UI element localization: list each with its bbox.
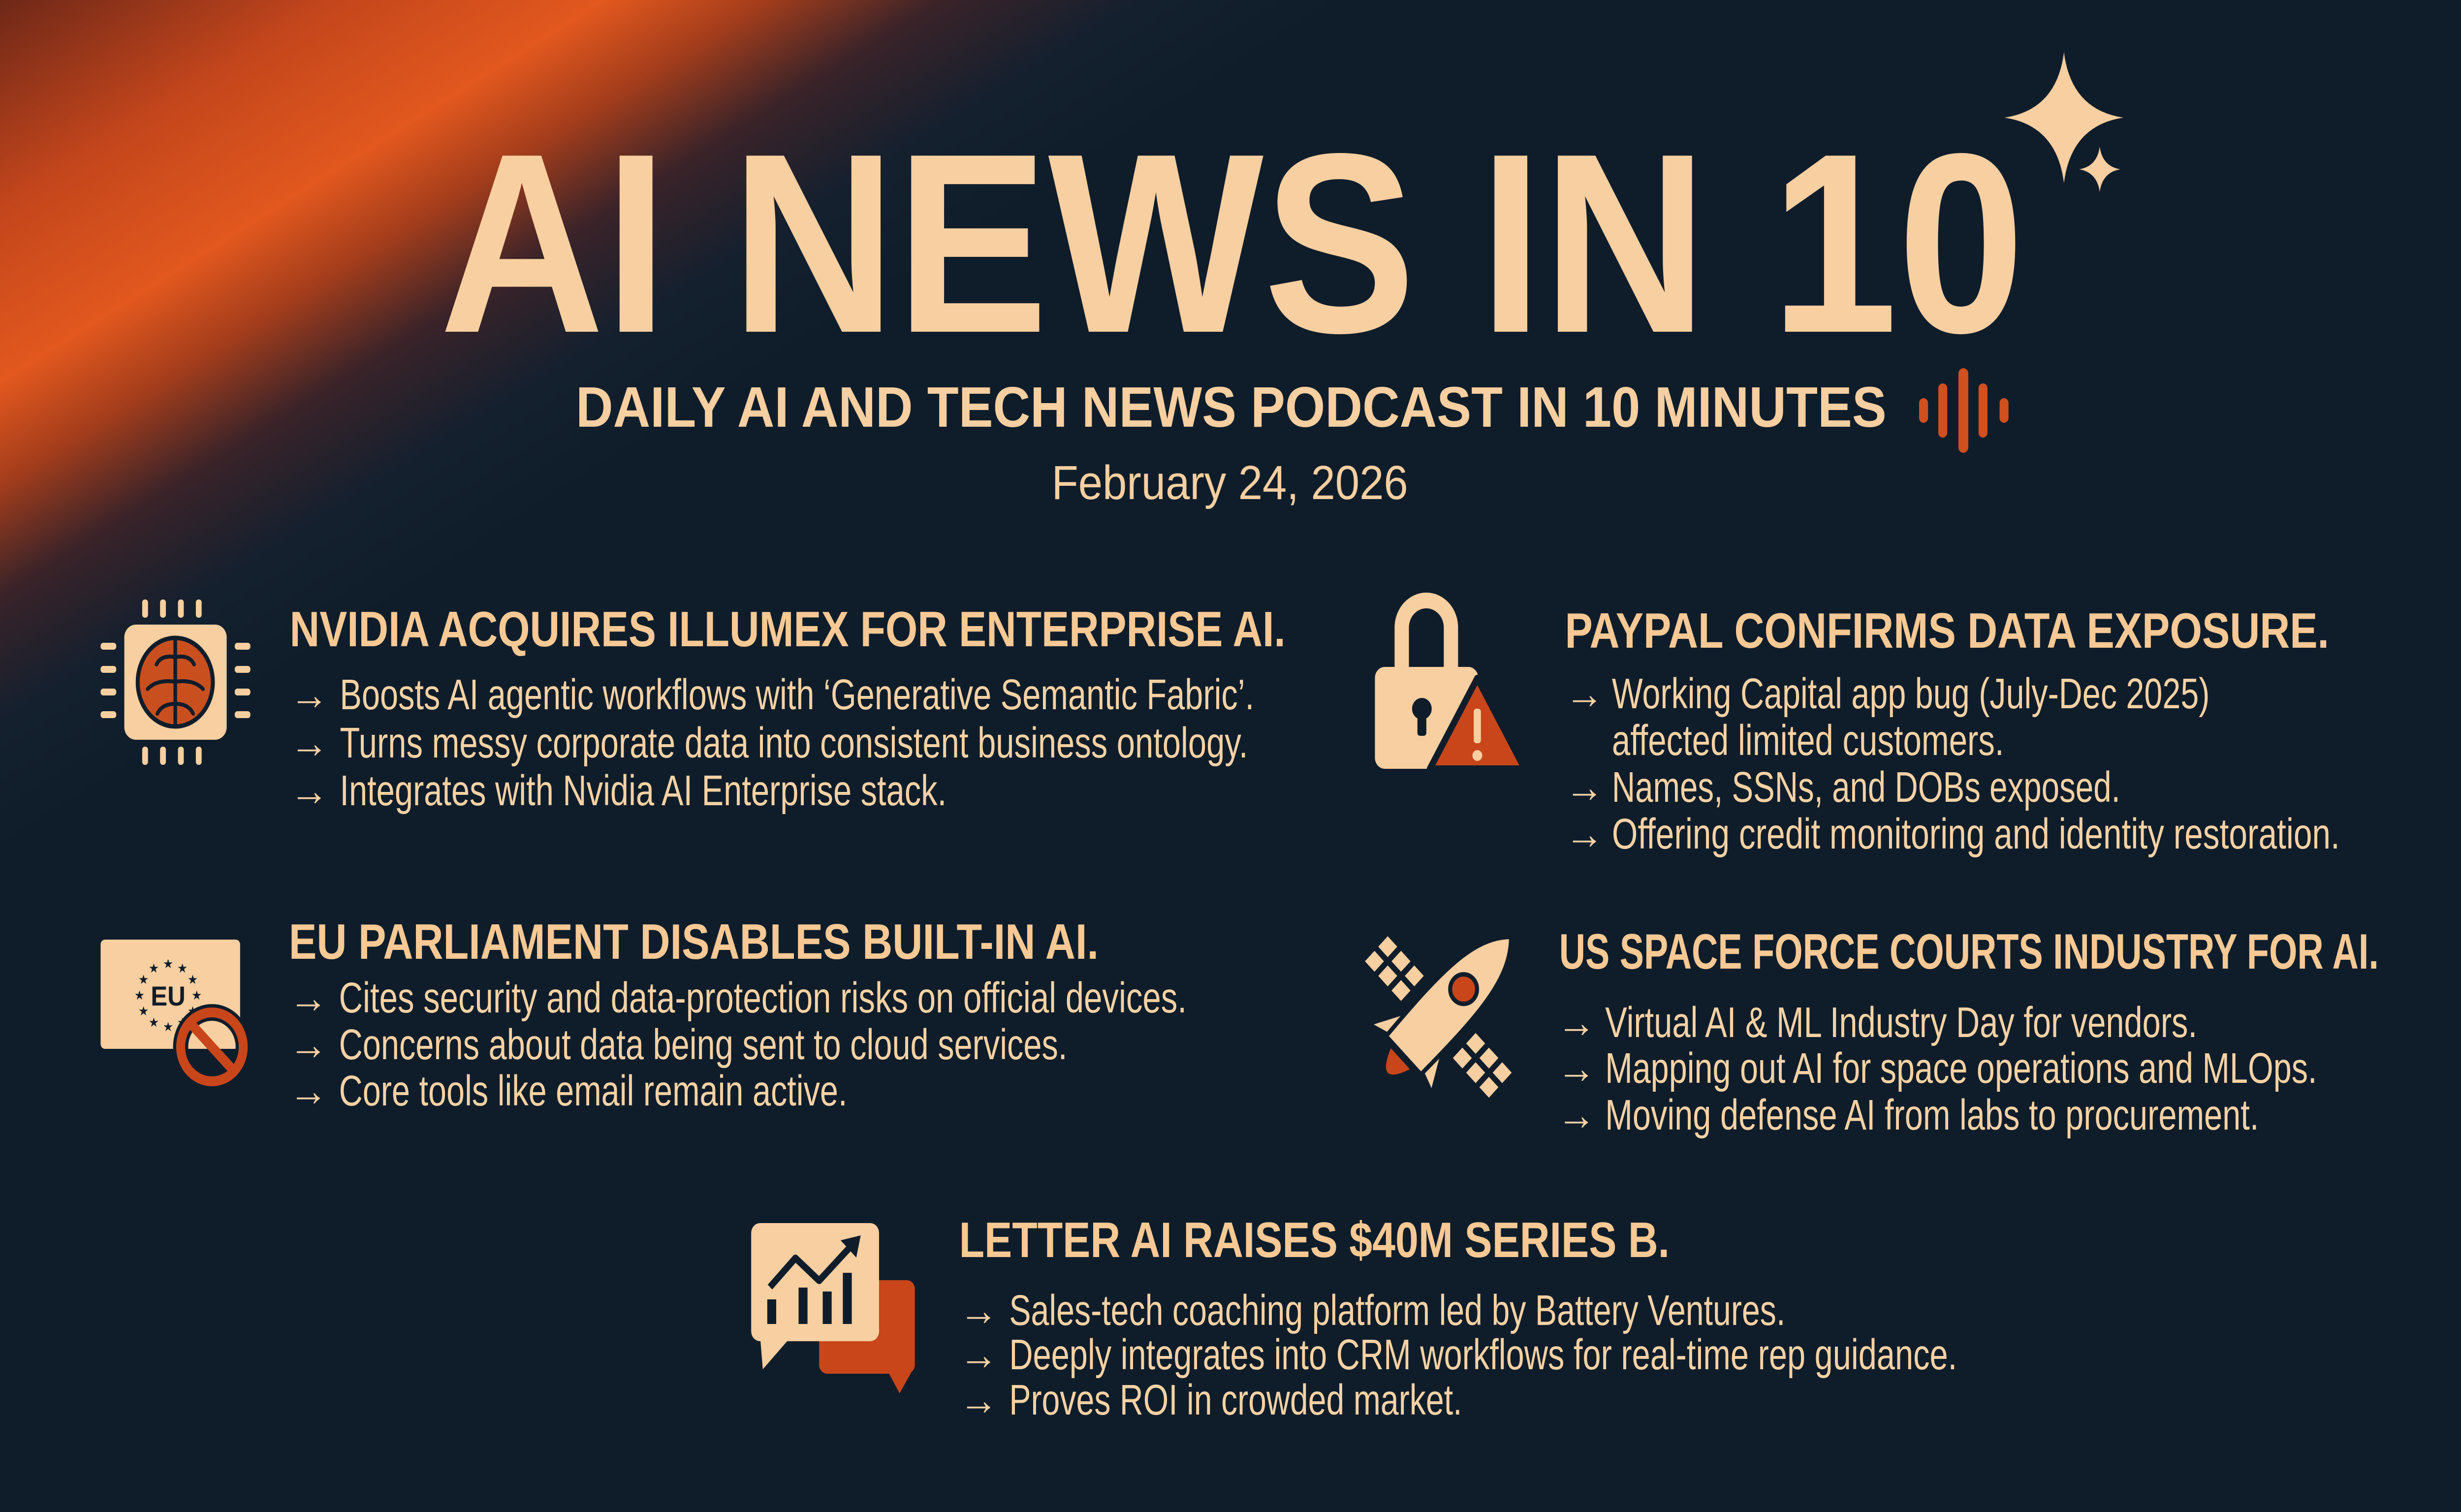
bullets: nvidia: → <box>290 670 329 719</box>
bullets: nvidia: Boosts AI agentic workflows with ‘Generative Semantic Fabric’. <box>340 670 1254 719</box>
icon: eu flag prohibited: ★ <box>149 1016 159 1030</box>
bullets: space force: → <box>1557 1044 1596 1092</box>
bullets: letter ai: → <box>959 1330 998 1379</box>
bullets: paypal: Names, SSNs, and DOBs exposed. <box>1612 763 2120 811</box>
heading: paypal: PAYPAL CONFIRMS DATA EXPOSURE. <box>1565 603 2329 659</box>
icon: eu flag prohibited: ★ <box>188 973 198 987</box>
bullets: space force: → <box>1557 998 1596 1046</box>
bullets: nvidia: Turns messy corporate data into consistent business ontology. <box>340 719 1248 767</box>
bullets: letter ai: → <box>959 1376 998 1424</box>
icon: chip with brain <box>100 599 251 765</box>
bullets: nvidia <box>290 670 1254 815</box>
bullets: eu: → <box>289 974 328 1022</box>
bullets: paypal: → <box>1565 763 1604 811</box>
bullets: paypal: affected limited customers. <box>1612 716 2004 764</box>
icon: sparkles <box>2004 52 2123 192</box>
icon: eu flag prohibited: ★ <box>177 1016 188 1030</box>
icon: rocket satellite <box>1325 867 1574 1142</box>
icon: eu flag prohibited: EU <box>151 981 186 1012</box>
icon: sound wave <box>1919 368 2009 453</box>
icon: eu flag prohibited: ★ <box>138 973 149 987</box>
icon: eu flag prohibited: ★ <box>177 962 188 976</box>
panel: space force <box>1325 867 2379 1142</box>
bullets: eu: Core tools like email remain active. <box>339 1067 847 1115</box>
bullets: eu: → <box>289 1067 328 1115</box>
bullets: paypal: Working Capital app bug (July-Dec 2025) <box>1612 669 2209 718</box>
panel: letter ai <box>751 1213 1957 1424</box>
bullets: paypal: Offering credit monitoring and identity restoration. <box>1612 810 2340 858</box>
icon: eu flag prohibited <box>100 940 243 1081</box>
bullets: space force <box>1557 998 2317 1139</box>
heading: nvidia: NVIDIA ACQUIRES ILLUMEX FOR ENTERPRISE AI. <box>290 602 1286 657</box>
bullets: space force: Mapping out AI for space operations and MLOps. <box>1605 1044 2317 1092</box>
heading: letter ai: LETTER AI RAISES $40M SERIES B. <box>959 1213 1670 1268</box>
bullets: eu: → <box>289 1020 328 1069</box>
bullets: letter ai: Deeply integrates into CRM workflows for real-time rep guidance. <box>1009 1330 1957 1379</box>
panel: nvidia <box>100 599 1286 815</box>
bullets: space force: Virtual AI & ML Industry Day for vendors. <box>1605 998 2197 1046</box>
bullets: nvidia: Integrates with Nvidia AI Enterprise stack. <box>340 766 947 815</box>
bullets: paypal <box>1565 669 2340 858</box>
bullets: nvidia: → <box>290 766 329 815</box>
icon: lock with warning <box>1375 600 1525 769</box>
panel: eu parliament <box>100 914 1187 1115</box>
icon: eu flag prohibited: ★ <box>134 989 145 1003</box>
icon: eu flag prohibited: ★ <box>163 957 173 971</box>
subtitle: DAILY AI AND TECH NEWS PODCAST IN 10 MINUTES <box>576 376 1887 439</box>
date: February 24, 2026 <box>1052 456 1408 509</box>
bullets: eu <box>289 974 1187 1115</box>
icon: eu flag prohibited: ★ <box>191 989 202 1003</box>
bullets: letter ai <box>959 1286 1957 1424</box>
panel: paypal <box>1375 600 2340 858</box>
icon: eu flag prohibited: ★ <box>149 962 159 976</box>
heading: eu: EU PARLIAMENT DISABLES BUILT-IN AI. <box>289 914 1099 970</box>
bullets: letter ai: Proves ROI in crowded market. <box>1009 1376 1462 1424</box>
icon: chat chart <box>751 1223 915 1393</box>
icon: eu flag prohibited: ★ <box>163 1020 173 1034</box>
bullets: eu: Cites security and data-protection risks on official devices. <box>339 974 1187 1022</box>
title: AI NEWS IN 10 <box>440 100 2024 386</box>
bullets: space force: → <box>1557 1091 1596 1139</box>
bullets: space force: Moving defense AI from labs to procurement. <box>1605 1091 2259 1139</box>
bullets: nvidia: → <box>290 719 329 767</box>
bullets: paypal: → <box>1565 810 1604 858</box>
bullets: paypal: → <box>1565 669 1604 718</box>
icon: eu flag prohibited: ★ <box>138 1005 149 1018</box>
bullets: letter ai: → <box>959 1286 998 1334</box>
bullets: eu: Concerns about data being sent to cloud services. <box>339 1020 1067 1069</box>
bullets: letter ai: Sales-tech coaching platform led by Battery Ventures. <box>1009 1286 1785 1334</box>
icon: eu flag prohibited: ★ <box>188 1005 198 1018</box>
